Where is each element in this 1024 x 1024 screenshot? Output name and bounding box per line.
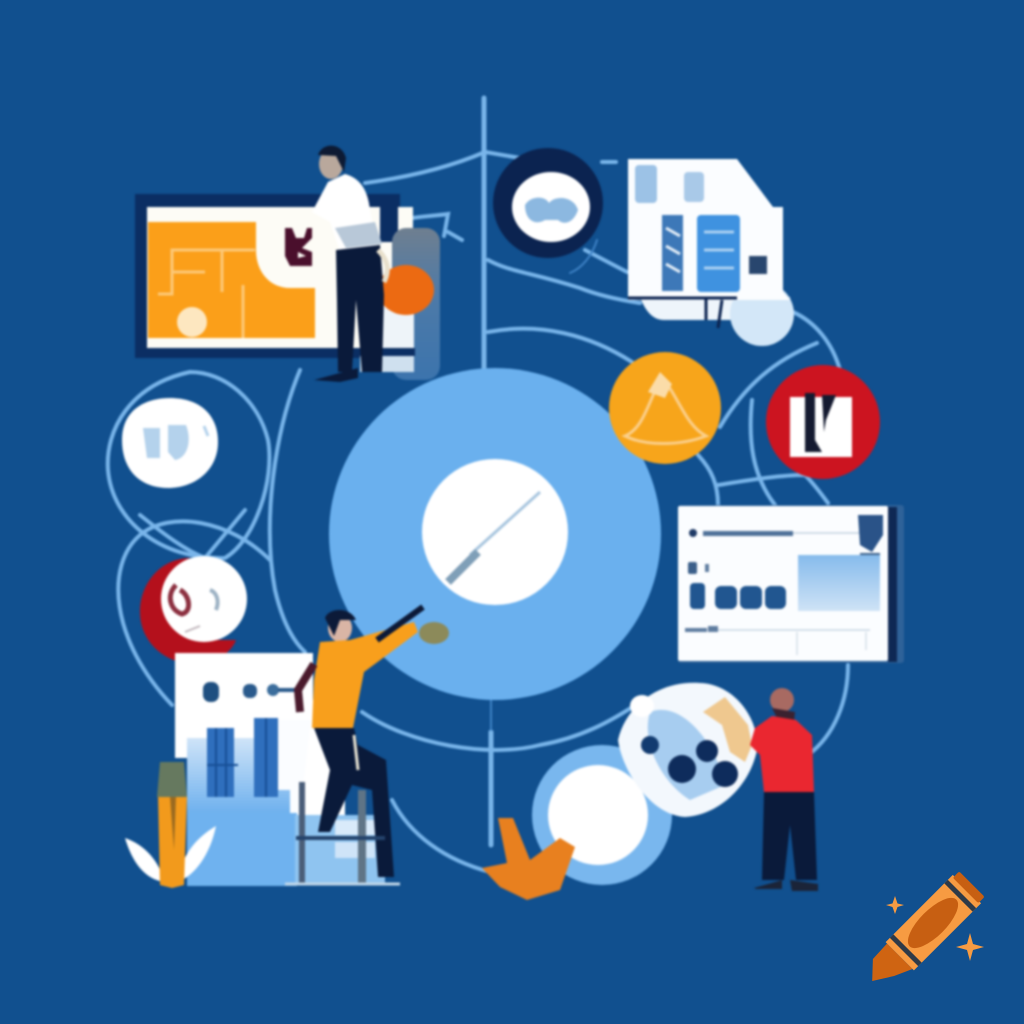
central circle: [329, 368, 661, 700]
panel: right dashboard: [678, 505, 904, 663]
orange circle badge by monitor: [378, 265, 434, 315]
floor plan lines: [158, 250, 255, 338]
logo: crayon with sparkles: [859, 870, 986, 997]
person: man in red shirt: [750, 688, 818, 891]
icon: white speech circle left: [122, 398, 218, 488]
icon: gear cluster: [618, 683, 757, 817]
illustration group: [108, 98, 904, 900]
panel: factory building: [175, 653, 385, 886]
person: man in white shirt: [312, 146, 387, 382]
panel: orange monitor: [135, 194, 440, 380]
panel: top right document: [628, 159, 794, 346]
connector lines network: [108, 98, 848, 872]
dark glyph: [285, 228, 312, 266]
icon: red circle: [766, 365, 880, 479]
person: woman in orange sweater: [285, 607, 449, 885]
pointer stick: [470, 492, 540, 555]
inner white circle: [422, 459, 568, 605]
icon: red and white circle: [140, 556, 247, 664]
ring circle bottom: [532, 745, 672, 885]
icon: dark ring circle: [493, 148, 603, 258]
icon: orange bell circle: [609, 352, 721, 464]
icon: orange plant with white leaves: [125, 762, 216, 888]
icon: orange arrow: [482, 818, 575, 900]
